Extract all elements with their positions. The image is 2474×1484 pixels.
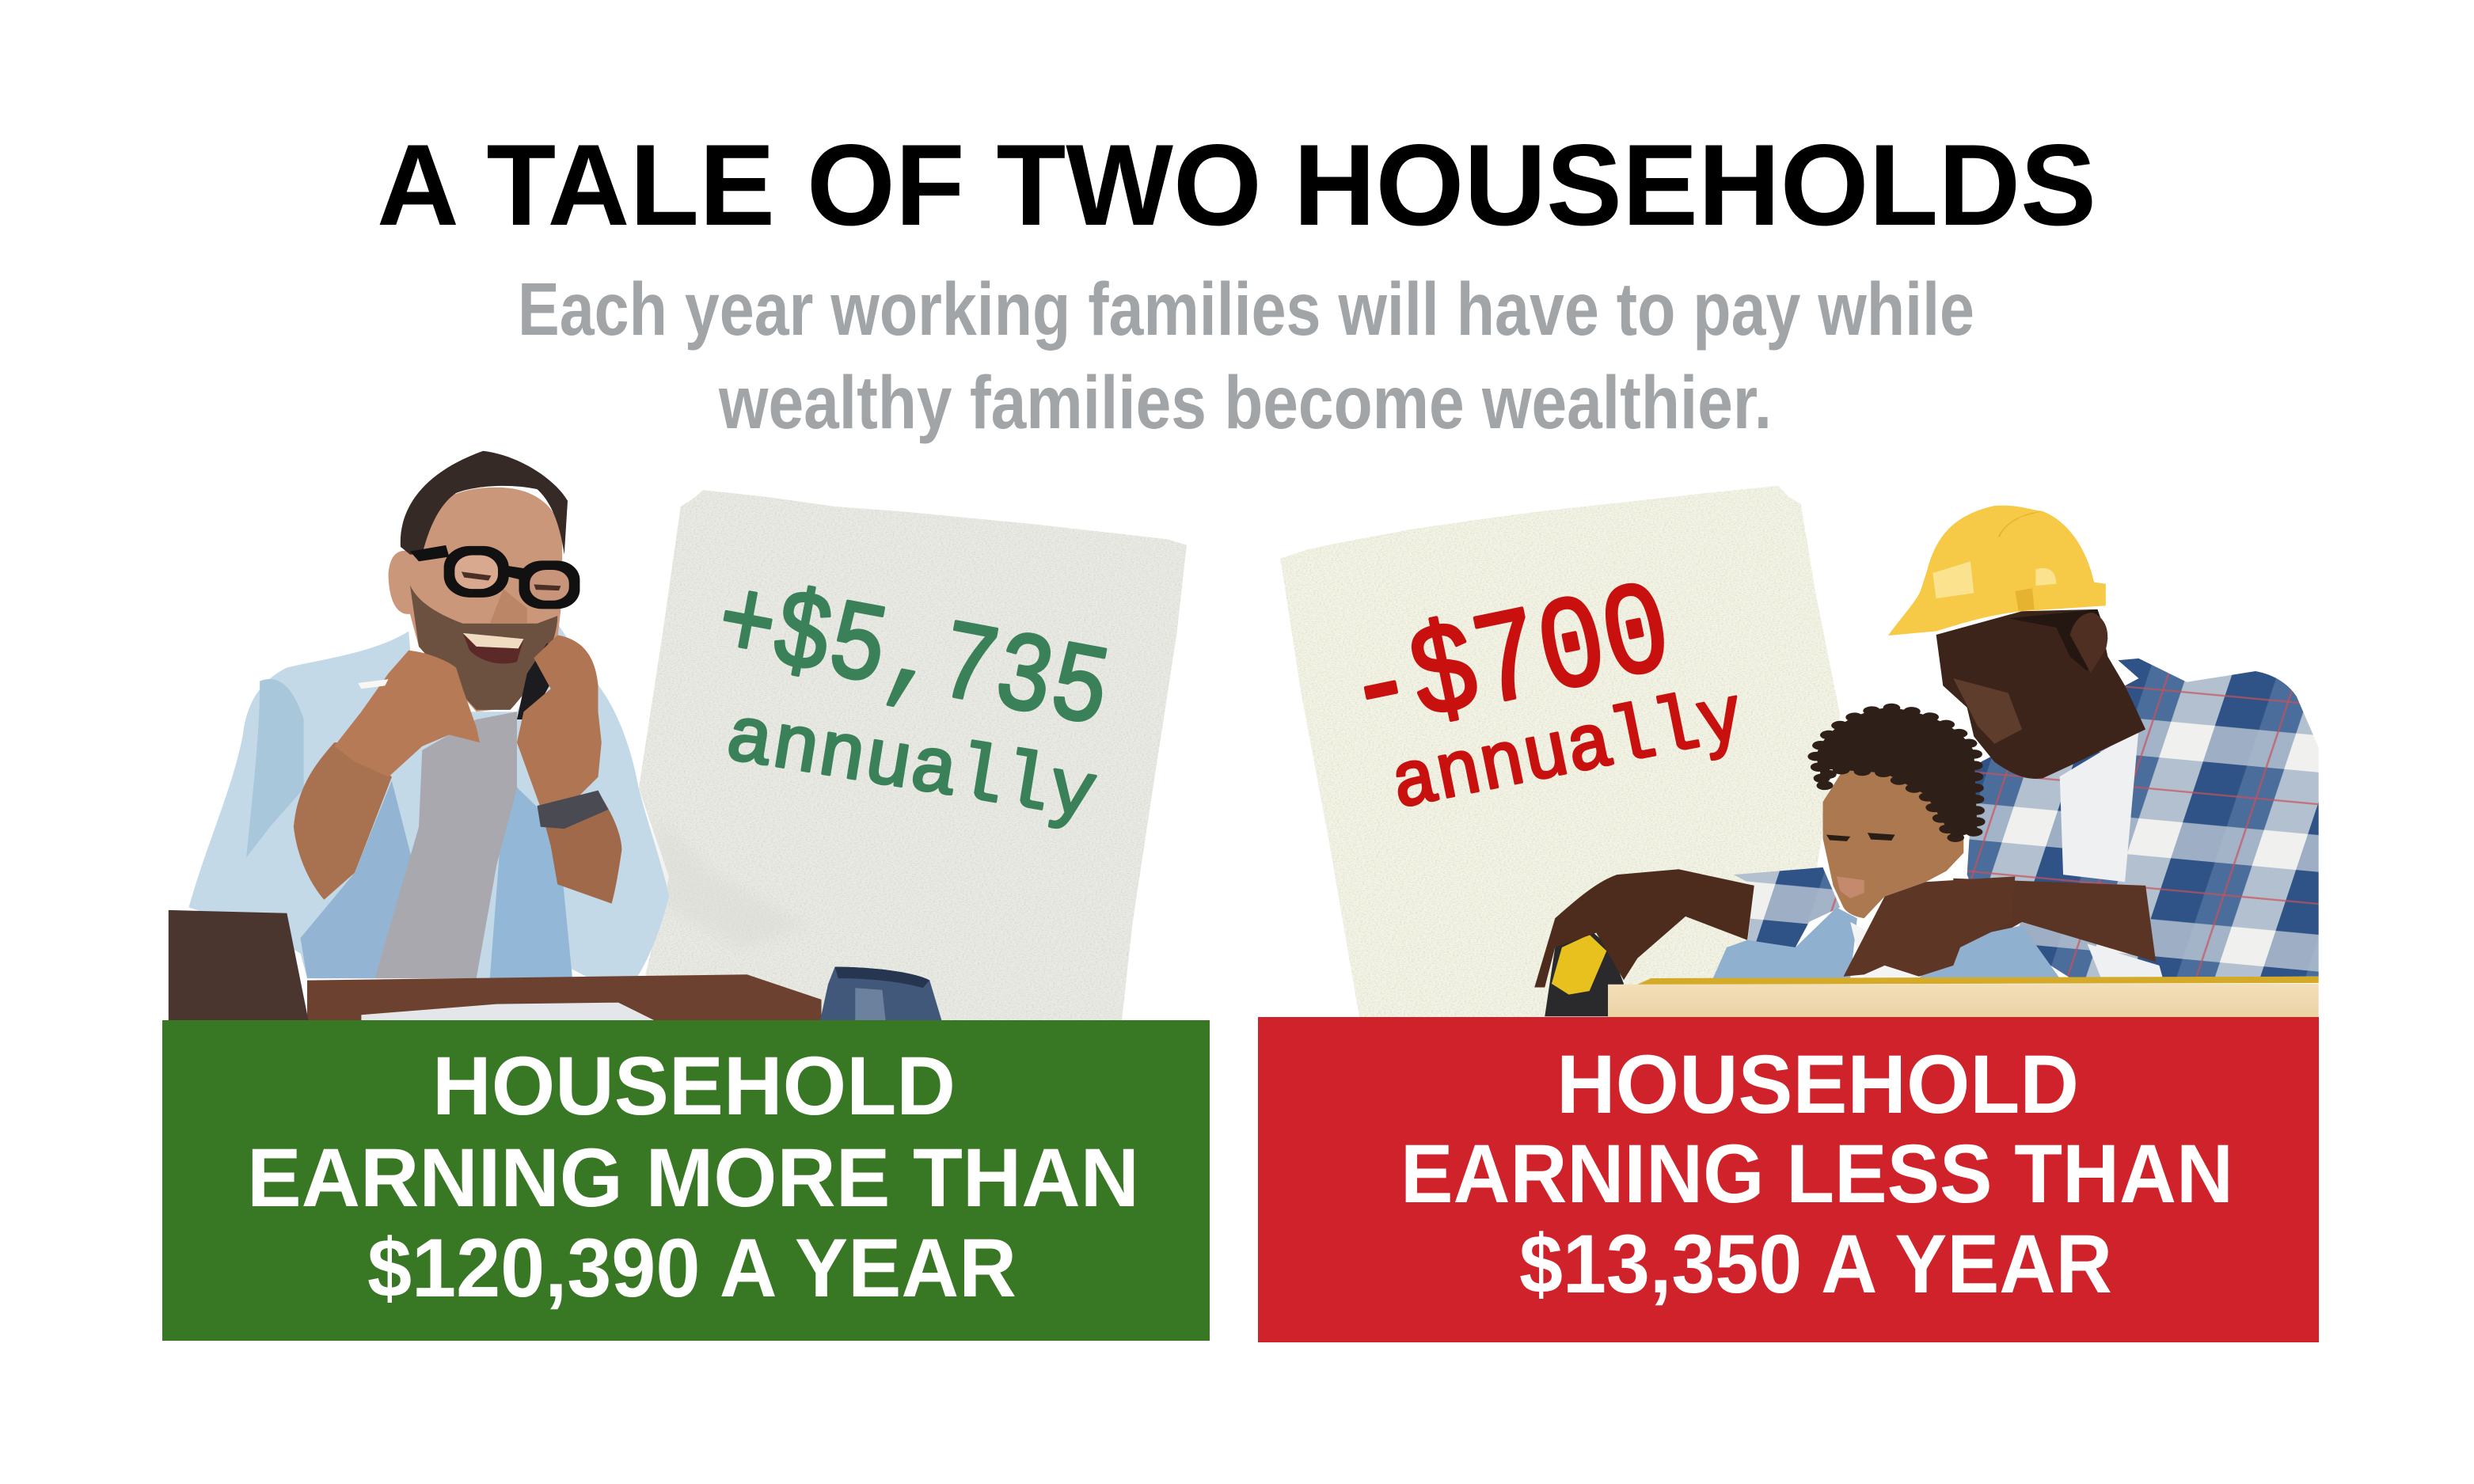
banner text: HOUSEHOLD <box>432 1040 956 1133</box>
banner text: HOUSEHOLD <box>1556 1038 2079 1131</box>
photo: father in hard hat and son measuring wood <box>1534 506 2319 1017</box>
note text: +$5,735 annually: +$5,735 <box>707 560 1119 757</box>
note text: -$700 annually: -$700 <box>1334 558 1684 769</box>
banner: red <box>1258 1017 2319 1342</box>
boy hair <box>1816 708 1978 838</box>
boy shirt <box>1713 907 2060 978</box>
banner text <box>247 1040 1139 1315</box>
tape measure <box>1545 929 1624 1016</box>
hair <box>401 451 568 555</box>
note text: +$5,735 annually <box>707 560 1119 841</box>
father sleeve <box>1734 867 1840 947</box>
father forearm <box>1953 879 2156 962</box>
left hand <box>334 651 480 777</box>
face <box>389 488 562 712</box>
father pointing hand <box>1844 876 2015 977</box>
mug <box>820 967 942 1021</box>
banner: green <box>162 1020 1210 1341</box>
pen <box>358 669 486 688</box>
note text: -$700 annually: annually <box>1385 674 1751 830</box>
title: A TALE OF TWO HOUSEHOLDS <box>377 120 2096 249</box>
subtitle: Each year working families will have to pay while <box>518 268 1974 351</box>
father face <box>1936 609 2145 779</box>
banner text: EARNING MORE THAN <box>247 1132 1139 1224</box>
banner text <box>1400 1038 2233 1311</box>
glasses <box>410 545 523 580</box>
banner text: $13,350 A YEAR <box>1519 1218 2112 1311</box>
paper note: green <box>639 490 1187 1021</box>
arms <box>294 742 392 900</box>
hard hat <box>1888 506 2106 636</box>
photo: man laughing on the phone at a desk <box>169 451 942 1021</box>
watch <box>538 791 608 829</box>
panel: low earning household <box>1258 486 2319 1342</box>
subtitle <box>518 268 1974 445</box>
paper note: red <box>1280 486 1840 1017</box>
subtitle: wealthy families become wealthier. <box>718 361 1772 445</box>
note text: +$5,735 annually: annually <box>720 694 1102 841</box>
boy face <box>1823 769 1963 918</box>
father hand on tape <box>1534 869 1754 987</box>
panel: high earning household <box>162 451 1210 1341</box>
right hand <box>517 635 602 807</box>
phone <box>517 643 554 719</box>
father shirt <box>1967 659 2319 978</box>
wood plank <box>1608 984 2319 1017</box>
shirt <box>188 624 669 986</box>
banner text: EARNING LESS THAN <box>1400 1128 2233 1220</box>
banner text: $120,390 A YEAR <box>367 1222 1017 1315</box>
desk <box>307 974 822 1021</box>
